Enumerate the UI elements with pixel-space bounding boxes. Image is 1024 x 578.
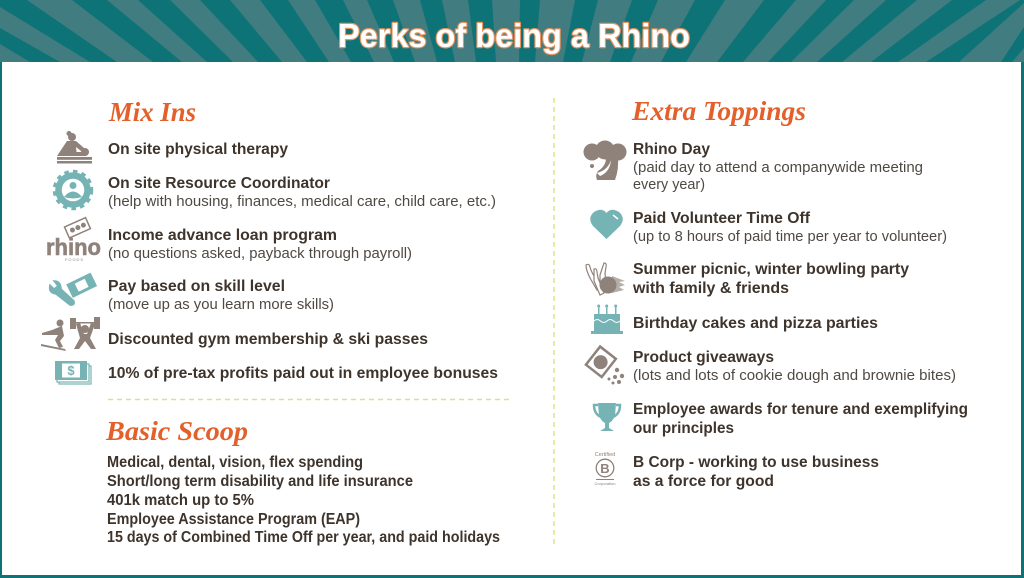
basic scoop list: Short/long term disability and life insurance — [107, 473, 413, 490]
topping: rhino day — [584, 140, 923, 193]
topping: employee awards: Employee awards for tenure and exemplifying — [633, 401, 968, 418]
basic scoop list: Employee Assistance Program (EAP) — [107, 511, 360, 528]
icon: massage — [57, 131, 92, 164]
mix in: resource coordinator: (help with housing, finances, medical care, child care, etc.) — [108, 194, 496, 210]
topping: rhino day: Rhino Day — [633, 141, 710, 158]
title: Perks of being a Rhino — [338, 18, 690, 55]
icon: rhino logo with banknote: FOODS — [65, 257, 83, 262]
basic scoop list: Medical, dental, vision, flex spending — [107, 454, 363, 471]
mix in: pay by skill — [50, 273, 334, 313]
icon: skier and weightlifter — [41, 317, 100, 351]
mix in: income advance: Income advance loan program — [108, 227, 337, 244]
mix in: bonuses — [55, 361, 498, 384]
heading: Mix Ins: Mix Ins — [108, 97, 196, 127]
header band with sunburst rays — [0, 0, 1024, 62]
topping: employee awards: our principles — [633, 420, 734, 437]
topping: product giveaways — [586, 347, 956, 384]
topping: picnic and bowling — [586, 261, 909, 297]
mix in: physical therapy — [57, 131, 288, 164]
topping: birthday cakes: Birthday cakes and pizza parties — [633, 315, 878, 332]
icon: certified B corporation — [595, 452, 615, 486]
icon: certified B corporation: Corporation — [595, 481, 615, 486]
topping: rhino day: (paid day to attend a companywide meeting — [633, 160, 923, 176]
icon: heart — [590, 210, 623, 239]
basic scoop list: 401k match up to 5% — [107, 492, 254, 509]
mix in: resource coordinator: On site Resource Coordinator — [108, 175, 330, 192]
heading: Extra Toppings: Extra Toppings — [631, 96, 806, 126]
icon: gear with person — [54, 172, 92, 208]
topping: product giveaways: Product giveaways — [633, 349, 774, 366]
topping: rhino day: every year) — [633, 177, 705, 193]
topping: product giveaways: (lots and lots of cookie dough and brownie bites) — [633, 368, 956, 384]
topping: employee awards — [594, 401, 968, 437]
topping: picnic and bowling: Summer picnic, winter bowling party — [633, 261, 909, 278]
icon: certified B corporation: Certified — [595, 452, 615, 458]
topping: volunteer time — [590, 210, 947, 245]
mix in: physical therapy: On site physical therapy — [108, 141, 288, 158]
icon: rhino logo with banknote — [46, 218, 101, 262]
mix in: pay by skill: Pay based on skill level — [108, 278, 285, 295]
basic scoop list — [107, 454, 500, 546]
icon: rhino with chef hat — [584, 140, 626, 180]
mix in: income advance: (no questions asked, payback through payroll) — [108, 246, 412, 262]
mix in: pay by skill: (move up as you learn more skills) — [108, 297, 334, 313]
mix in: gym and ski — [41, 317, 428, 351]
icon: cash stack — [55, 361, 91, 384]
topping: picnic and bowling: with family & friends — [632, 280, 789, 297]
icon: wrench and banknote — [50, 273, 97, 305]
heading: Basic Scoop: Basic Scoop — [105, 416, 248, 446]
icon: cash stack: $ — [67, 363, 75, 378]
mix in: bonuses: 10% of pre-tax profits paid out in employee bonuses — [108, 365, 498, 382]
icon: trophy — [594, 403, 620, 431]
mix in: income advance — [46, 218, 412, 262]
mix in: resource coordinator — [54, 172, 496, 210]
icon: bowling pins and ball — [586, 263, 625, 295]
basic scoop list: 15 days of Combined Time Off per year, and paid holidays — [107, 529, 500, 546]
icon: cookie dough bag — [586, 347, 624, 384]
topping: volunteer time: Paid Volunteer Time Off — [633, 210, 811, 227]
icon: rhino logo with banknote: rhino — [46, 234, 101, 260]
mix in: gym and ski: Discounted gym membership & ski passes — [108, 331, 428, 348]
icon: birthday cake — [591, 304, 623, 334]
icon: certified B corporation: B — [600, 461, 610, 476]
topping: b corp: B Corp - working to use business — [633, 454, 879, 471]
topping: b corp — [595, 452, 879, 490]
topping: volunteer time: (up to 8 hours of paid time per year to volunteer) — [633, 229, 947, 245]
topping: b corp: as a force for good — [633, 473, 774, 490]
topping: birthday cakes — [591, 304, 878, 334]
